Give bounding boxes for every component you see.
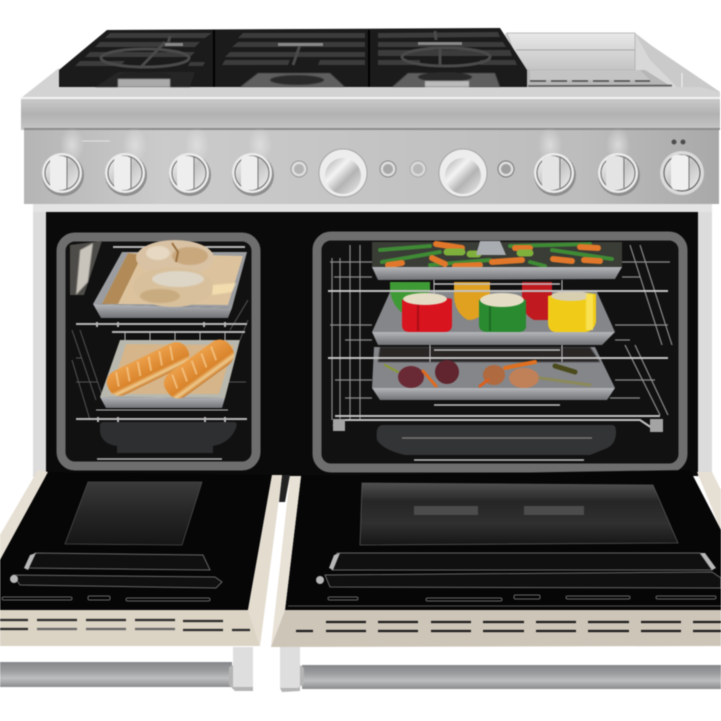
pepper yellow front <box>548 291 596 332</box>
front loaf <box>133 267 213 307</box>
rack slide brackets <box>333 419 663 432</box>
knob: burner 3 <box>169 153 211 196</box>
pepper green front <box>479 293 526 332</box>
pepper green back <box>390 282 430 314</box>
top tray with roasted vegetables <box>372 241 622 280</box>
button 4 <box>498 161 514 177</box>
right door <box>271 470 721 647</box>
right door interior <box>285 470 721 610</box>
middle tray with stuffed peppers <box>372 282 615 345</box>
oven cavity surround <box>46 212 698 476</box>
left door interior <box>0 472 272 610</box>
pepper red back <box>522 282 552 320</box>
left door window <box>65 482 202 545</box>
knob: burner 5 <box>534 153 576 196</box>
burners <box>95 72 500 87</box>
left door <box>0 470 282 646</box>
tray with baguettes <box>100 335 240 408</box>
back loaf <box>136 240 214 276</box>
left oven side wires <box>72 300 248 420</box>
knob: burner 4 <box>232 153 274 196</box>
indicator lights <box>672 140 686 144</box>
left door slots <box>0 620 250 630</box>
pepper red front <box>402 293 452 332</box>
gap between doors <box>279 475 290 502</box>
right oven bottom plate <box>377 425 616 455</box>
bottom tray with root vegetables <box>372 347 615 400</box>
right oven frame <box>317 236 683 468</box>
oven dial left <box>319 149 367 197</box>
gas grates <box>59 28 527 87</box>
right door window <box>360 483 678 545</box>
right door vents <box>328 595 716 601</box>
left door vents <box>2 596 210 601</box>
right oven rack rails <box>328 280 668 460</box>
left door handle <box>0 647 253 691</box>
left oven <box>61 237 256 466</box>
right oven <box>317 236 683 468</box>
knob: burner 2 <box>105 153 147 196</box>
deck <box>21 68 720 100</box>
left oven bottom plate <box>100 422 237 453</box>
left oven frame <box>61 237 256 466</box>
knob: burner 1 <box>42 153 84 196</box>
left oven rack rails <box>76 247 247 459</box>
rack side wires <box>330 245 672 420</box>
left door front <box>0 610 260 646</box>
side pillars <box>33 212 712 477</box>
right door ridges <box>325 553 721 588</box>
knob: griddle <box>598 153 640 196</box>
griddle <box>505 33 720 100</box>
button 3 <box>410 161 426 177</box>
button 1 <box>291 161 307 177</box>
front lip <box>21 97 720 130</box>
knob: burner 6 <box>660 151 704 195</box>
right door side strip <box>271 476 301 647</box>
left door side strip <box>248 475 282 646</box>
right door handle <box>280 647 721 692</box>
tray with bread loaves <box>93 240 247 318</box>
baguette right <box>159 335 239 403</box>
left oven interior reflection <box>70 241 102 295</box>
baguette left <box>103 338 193 400</box>
oven dial right <box>439 149 487 197</box>
beets and carrots <box>398 366 424 388</box>
left door ridges <box>13 553 222 588</box>
right door front <box>271 610 721 647</box>
control panel <box>24 127 719 212</box>
right door outer edge <box>697 472 721 530</box>
left door outer edge <box>0 470 48 560</box>
right door slots <box>296 622 721 631</box>
button 2 <box>380 161 396 177</box>
pepper yellow back <box>454 282 490 320</box>
